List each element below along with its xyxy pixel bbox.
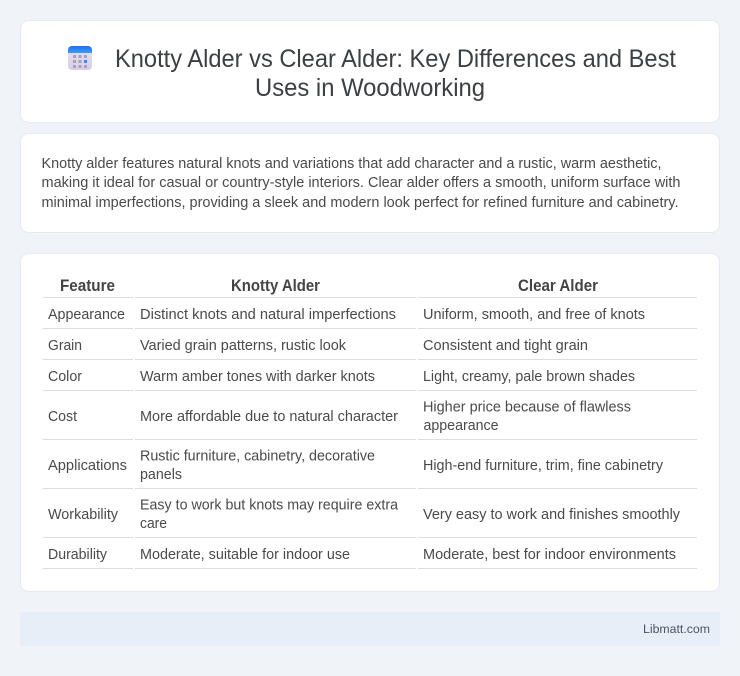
row: cost — [48, 400, 631, 434]
row: workability — [48, 498, 681, 532]
row: workability: Workability — [48, 507, 119, 523]
row: color: Color — [48, 369, 82, 385]
row: applications — [48, 448, 664, 483]
text block: introduction — [42, 156, 680, 211]
row: grain: Varied grain patterns, rustic look — [140, 338, 347, 354]
row: appearance: Appearance — [48, 307, 125, 323]
table header: Clear Alder — [518, 277, 599, 295]
row: durability: Moderate, best for indoor environments — [423, 547, 676, 563]
row: appearance: Distinct knots and natural imperfections — [140, 307, 396, 323]
row: cost: appearance — [424, 418, 498, 434]
row: appearance — [48, 307, 645, 323]
panel: comparison table — [20, 254, 720, 592]
panel: introduction — [20, 134, 720, 232]
row: applications: Rustic furniture, cabinetry, decorative — [140, 448, 375, 464]
row: applications: panels — [140, 467, 182, 483]
row: durability — [48, 547, 676, 563]
table header — [60, 277, 599, 295]
row: grain: Consistent and tight grain — [423, 338, 588, 354]
row: color: Light, creamy, pale brown shades — [423, 369, 635, 385]
title: Uses in Woodworking — [255, 74, 485, 102]
row: grain — [48, 338, 588, 354]
footer: Libmatt.com — [643, 622, 710, 636]
row: grain: Grain — [48, 338, 82, 354]
row: cost: Higher price because of flawless — [423, 400, 631, 416]
footer — [20, 612, 720, 646]
row: workability: Very easy to work and finishes smoothly — [423, 507, 681, 523]
text block: introduction: minimal imperfections, providing a sleek and modern look perfect for refined furniture and cabinetry. — [42, 195, 678, 211]
row: workability: care — [140, 516, 167, 532]
row: durability: Durability — [48, 547, 108, 563]
text block: introduction: Knotty alder features natural knots and variations that add character and a rustic, warm aesthetic, — [42, 156, 662, 172]
row: durability: Moderate, suitable for indoor use — [140, 547, 350, 563]
panel: title card — [20, 20, 720, 122]
row: applications: Applications — [48, 458, 127, 474]
table header: Knotty Alder — [231, 277, 321, 295]
row: cost: More affordable due to natural character — [140, 409, 398, 425]
row: cost: Cost — [48, 409, 77, 425]
row: color: Warm amber tones with darker knots — [140, 369, 375, 385]
table header: Feature — [60, 277, 115, 295]
row: appearance: Uniform, smooth, and free of knots — [423, 307, 645, 323]
title: Knotty Alder vs Clear Alder: Key Differences and Best — [115, 45, 676, 73]
text block: introduction: making it ideal for casual or country-style interiors. Clear alder offers a smooth, uniform surface with — [42, 175, 680, 191]
icon: calendar — [68, 46, 92, 70]
row: workability: Easy to work but knots may require extra — [140, 498, 399, 514]
row: applications: High-end furniture, trim, fine cabinetry — [423, 458, 664, 474]
title — [115, 45, 676, 102]
row: color — [48, 369, 635, 385]
